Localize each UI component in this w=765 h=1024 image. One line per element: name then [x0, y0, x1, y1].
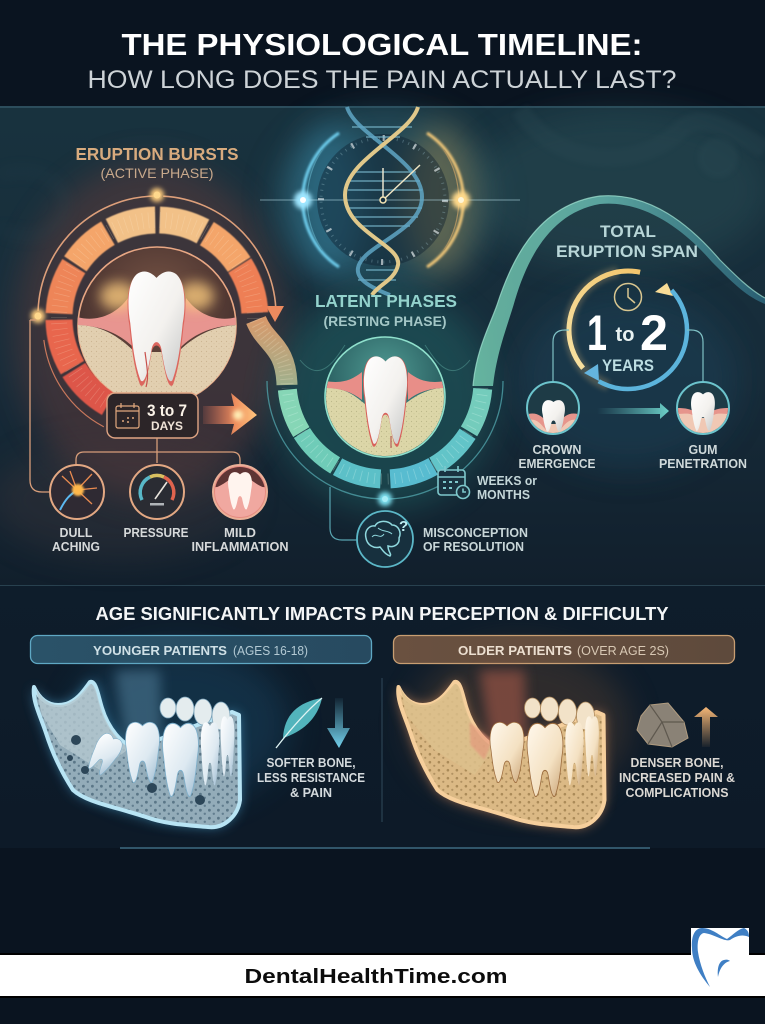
symptom labels: PRESSURE: [124, 526, 188, 540]
icon: gum penetration: [677, 382, 729, 434]
tooth illustration: active: [77, 247, 240, 410]
label: denser bone: [619, 756, 735, 800]
heading: latent phases: [315, 291, 457, 329]
pill: younger: (AGES 16-18): [233, 643, 308, 658]
number: 1 to 2: to: [616, 324, 634, 346]
illustration: young jaw: [34, 670, 240, 827]
segmented ring: [278, 388, 492, 488]
number: 1 to 2: 1: [587, 305, 607, 361]
connector lines: [30, 320, 240, 492]
misconception label: OF RESOLUTION: [423, 540, 524, 554]
symptom labels: ACHING: [52, 540, 100, 554]
pill: older: [394, 636, 734, 664]
arrow: up: [694, 707, 718, 747]
icon: brain with question mark: ?: [399, 518, 408, 535]
duration badge: 3 to 7 days: 3 to 7: [147, 401, 187, 420]
icon: brain with question mark: [357, 511, 413, 567]
icon: calendar clock: [438, 466, 470, 498]
heading: eruption bursts: ERUPTION BURSTS: [76, 144, 238, 164]
stage labels: PENETRATION: [659, 457, 747, 471]
panel: eruption bursts: [28, 148, 298, 551]
icon: clock: [614, 284, 642, 310]
band into latent phase: [256, 320, 287, 385]
stage labels: EMERGENCE: [518, 457, 596, 471]
icon: rock: [637, 703, 688, 747]
heading: latent phases: LATENT PHASES: [315, 291, 457, 311]
duration badge: 3 to 7 days: DAYS: [151, 419, 183, 433]
weeks or months label: MONTHS: [477, 488, 530, 502]
years label: YEARS: [602, 356, 654, 375]
panel: total eruption span: [518, 222, 747, 471]
icon: DNA clock: [260, 107, 520, 295]
logo: tooth: [691, 928, 749, 987]
icon: feather: [276, 698, 322, 748]
label: softer bone: LESS RESISTANCE: [257, 771, 365, 785]
website name: DentalHealthTime.com: [244, 966, 508, 988]
panel: younger patients: [30, 636, 372, 827]
heading: total eruption span: [556, 222, 698, 261]
icon: calendar: [116, 403, 139, 428]
title: HOW LONG DOES THE PAIN ACTUALLY LAST?: [88, 66, 676, 94]
outer arc: [267, 263, 503, 506]
segmented ring: [44, 206, 269, 416]
duration badge: 3 to 7 days: [107, 393, 198, 438]
pill: older: (OVER AGE 2S): [577, 643, 669, 658]
title: [88, 27, 676, 94]
stage labels: [518, 443, 747, 471]
panel: older patients: [394, 636, 735, 827]
symptom labels: [52, 526, 288, 554]
symptom labels: DULL: [60, 526, 93, 540]
arrow: burst: [203, 393, 257, 435]
heading: eruption bursts: [76, 144, 238, 181]
icon: pressure gauge: [130, 465, 184, 519]
illustration: older jaw: [398, 670, 604, 827]
tooth illustration: resting: [325, 337, 446, 460]
heading: age section: AGE SIGNIFICANTLY IMPACTS PAIN PERCEPTION & DIFFICULTY: [96, 603, 669, 624]
heading: eruption bursts: (ACTIVE PHASE): [100, 165, 214, 181]
pill: younger: [30, 636, 372, 664]
footer band: [0, 953, 765, 998]
label: softer bone: [257, 756, 365, 800]
panel: latent phases: [249, 196, 765, 567]
arrow: crown to gum: [597, 403, 669, 419]
heading: total eruption span: TOTAL: [600, 222, 656, 241]
misconception label: MISCONCEPTION: [423, 526, 528, 540]
outer arc with arrow: [3, 172, 311, 480]
cycle ring: [545, 247, 711, 413]
title: THE PHYSIOLOGICAL TIMELINE:: [122, 27, 642, 62]
label: softer bone: & PAIN: [290, 786, 332, 800]
label: denser bone: COMPLICATIONS: [626, 786, 728, 800]
number: 1 to 2: [587, 305, 668, 361]
label: denser bone: INCREASED PAIN &: [619, 771, 735, 785]
weeks or months label: [477, 474, 537, 502]
connectors: [553, 330, 703, 382]
weeks or months label: WEEKS or: [477, 474, 537, 488]
heading: total eruption span: ERUPTION SPAN: [556, 242, 698, 261]
heading: latent phases: (RESTING PHASE): [324, 313, 446, 329]
pill: older: OLDER PATIENTS: [458, 643, 572, 658]
number: 1 to 2: 2: [640, 305, 668, 361]
icon: crown emergence: [527, 382, 579, 434]
misconception label: [423, 526, 528, 554]
stage labels: GUM: [688, 443, 718, 457]
symptom labels: INFLAMMATION: [192, 540, 288, 554]
label: denser bone: DENSER BONE,: [630, 756, 724, 770]
label: softer bone: SOFTER BONE,: [266, 756, 356, 770]
teal curve: total span: [300, 196, 765, 386]
symptom labels: MILD: [224, 526, 256, 540]
stage labels: CROWN: [532, 443, 582, 457]
arrow: down: [327, 698, 350, 748]
pill: younger: YOUNGER PATIENTS: [93, 643, 227, 658]
icon: mild inflammation: [213, 465, 267, 519]
connector: misconception: [330, 487, 357, 540]
icon: dull aching: [50, 465, 104, 519]
